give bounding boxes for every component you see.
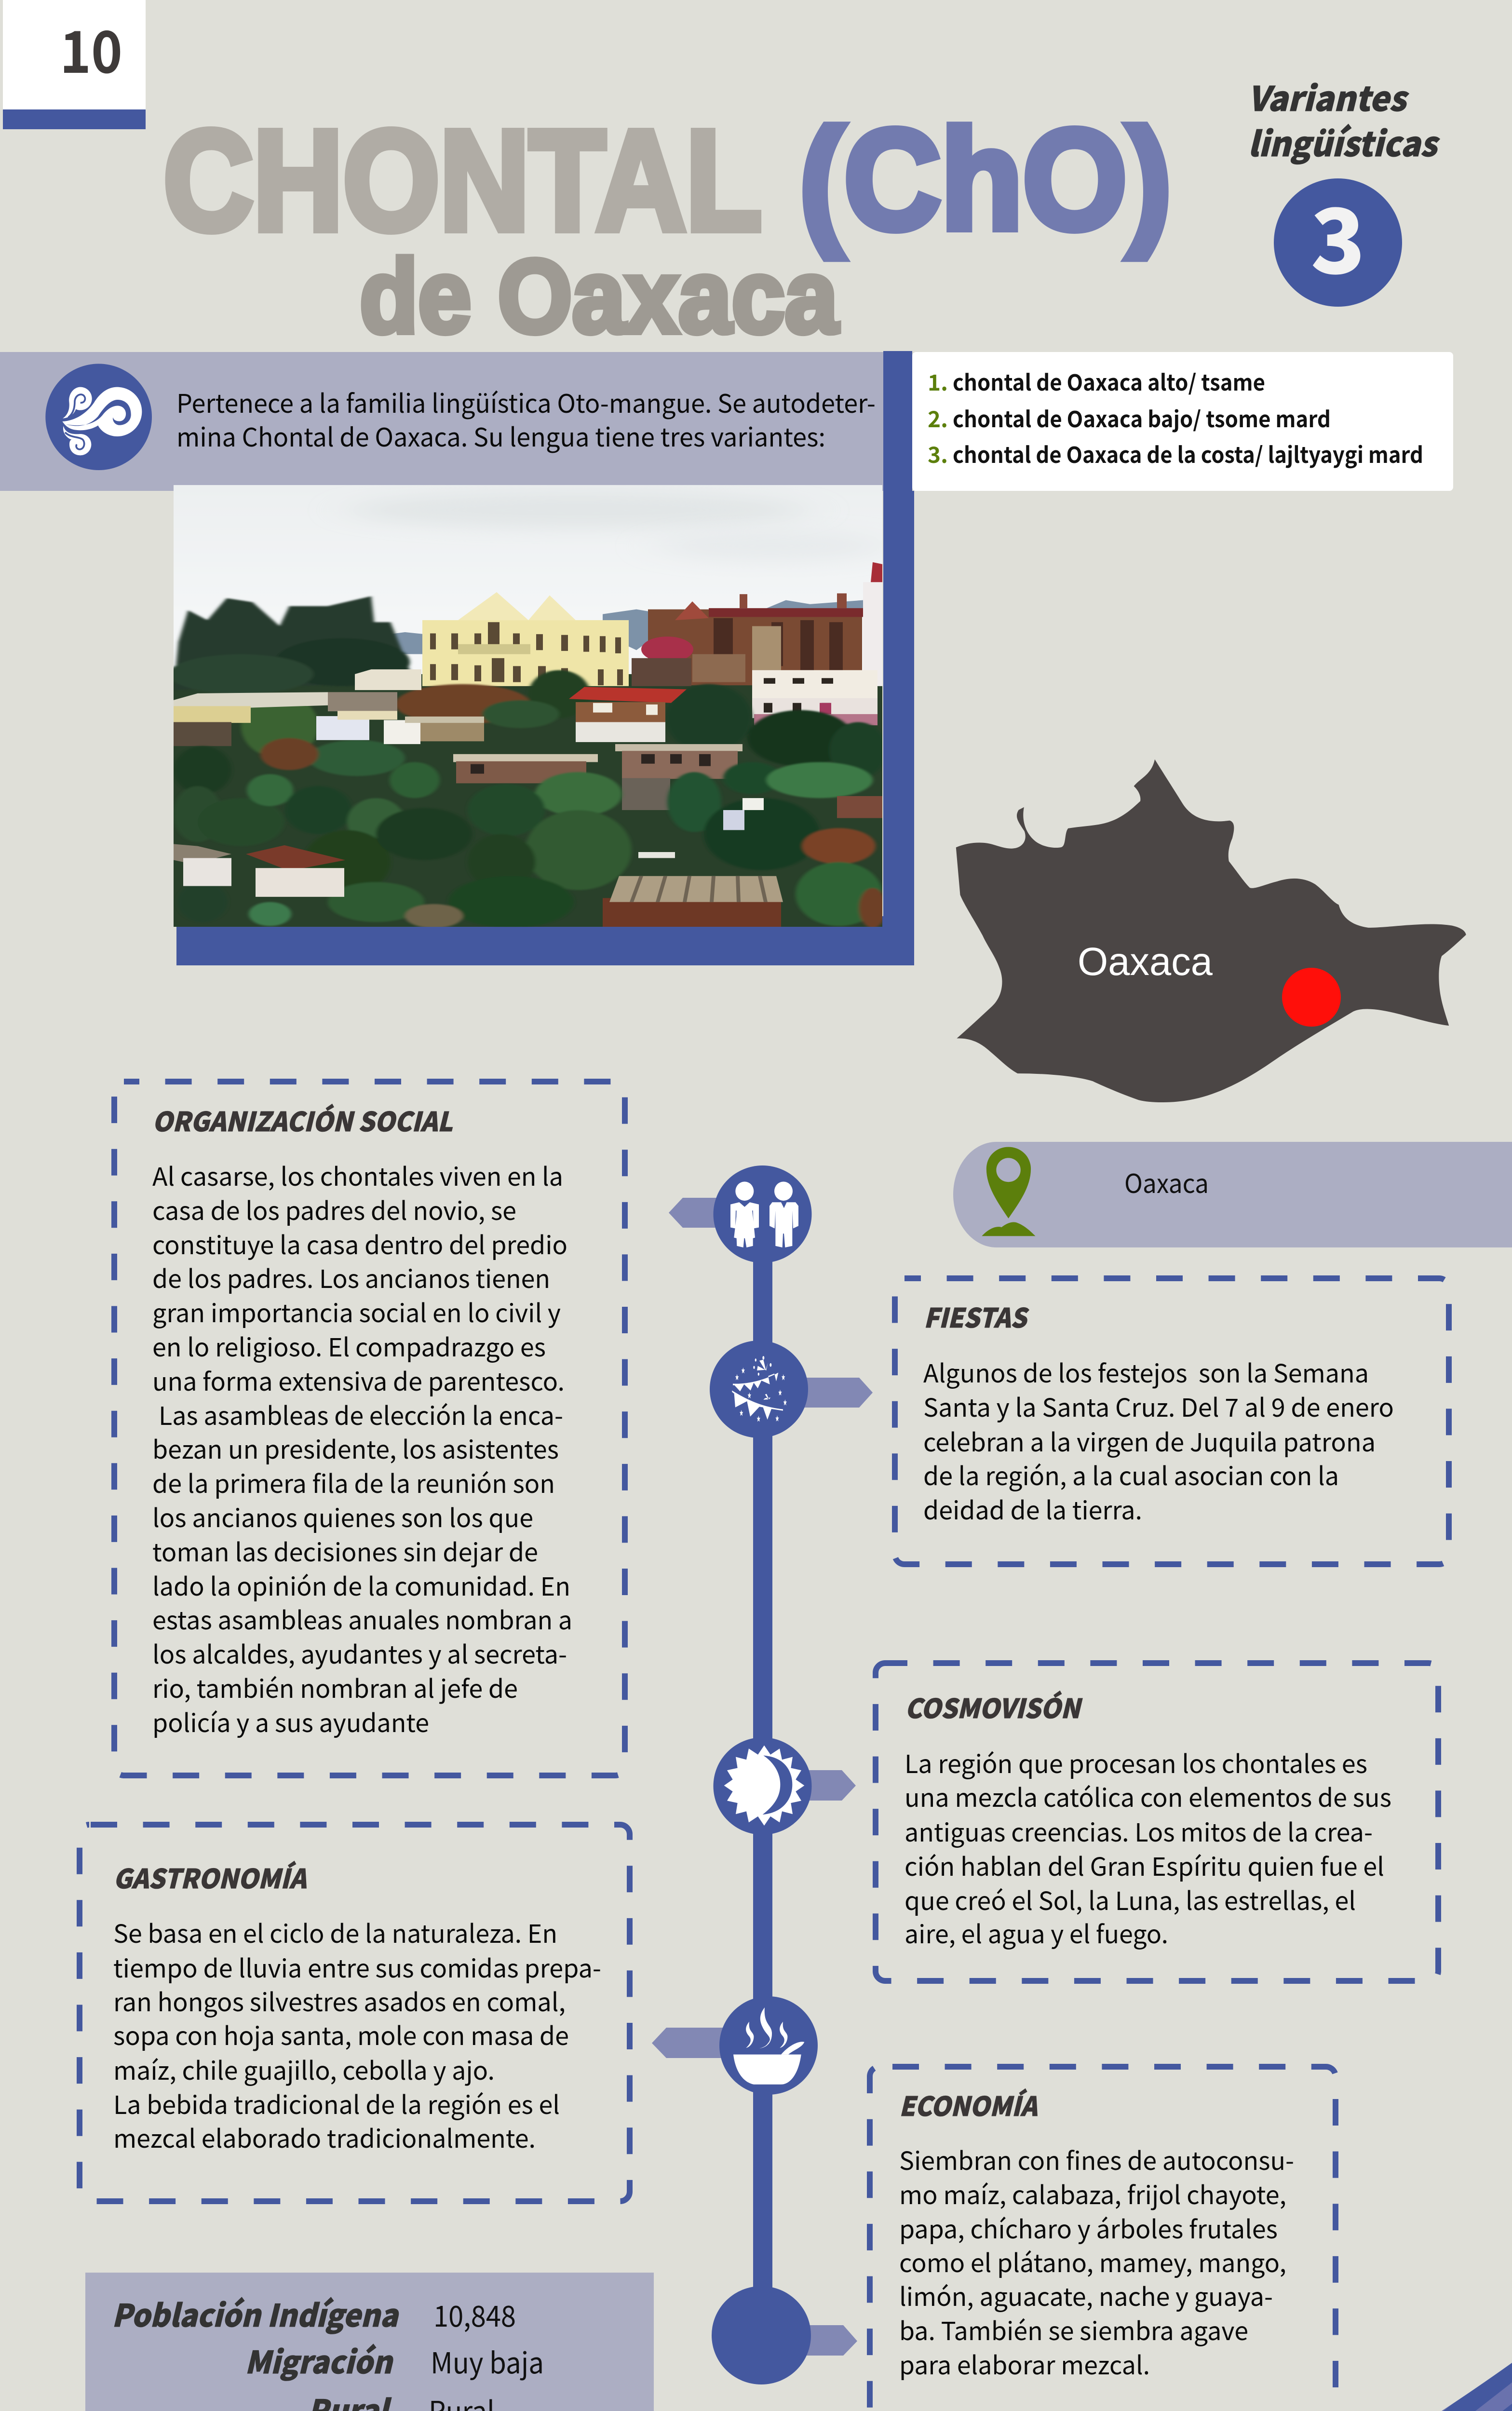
body text: maíz, chile guajillo, cebolla y ajo. — [113, 2051, 495, 2087]
pill label: Oaxaca — [1124, 1163, 1209, 1201]
panel: statistics — [85, 2273, 654, 2411]
node: sun and moon — [714, 1737, 812, 1835]
stat: población indígena: Población Indígena — [112, 2291, 400, 2336]
body text: papa, chícharo y árboles frutales — [899, 2209, 1278, 2246]
woven pattern footer — [3, 2363, 1512, 2411]
body text: en lo religioso. El compadrazgo es — [152, 1327, 546, 1364]
body text: Se basa en el ciclo de la naturaleza. En — [113, 1914, 557, 1950]
icon: location pin — [982, 1147, 1036, 1236]
location pill — [953, 1142, 1512, 1247]
arrow 2 — [791, 1378, 873, 1408]
body text: de los padres. Los ancianos tienen — [152, 1259, 550, 1295]
body text: tiempo de lluvia entre sus comidas prepa- — [113, 1949, 601, 1985]
body text: de la región, a la cual asocian con la — [923, 1456, 1339, 1492]
title: Chontal: CHONTAL — [163, 101, 762, 260]
arrow 3 — [791, 1770, 856, 1801]
body text: aire, el agua y el fuego. — [904, 1914, 1168, 1950]
body text: celebran a la virgen de Juquila patrona — [923, 1422, 1376, 1459]
body text: rio, también nombran al jefe de — [152, 1669, 518, 1705]
brown church — [648, 610, 862, 685]
arrow 5 — [791, 2325, 857, 2356]
map marker — [1282, 968, 1341, 1027]
body text: limón, aguacate, nache y guaya- — [899, 2277, 1273, 2313]
body text: mezcal elaborado tradicionalmente. — [113, 2119, 536, 2155]
body text: toman las decisiones sin dejar de — [152, 1532, 538, 1569]
body text: ba. También se siembra agave — [899, 2311, 1248, 2347]
body text: una mezcla católica con elementos de sus — [904, 1778, 1391, 1814]
intro text — [176, 384, 876, 454]
body text: Santa y la Santa Cruz. Del 7 al 9 de enero — [923, 1388, 1394, 1424]
photo frame — [176, 351, 914, 965]
stat: población indígena: 10,848 — [433, 2293, 516, 2335]
variants list: chontal de Oaxaca de la costa/ lajltyaygi mard — [953, 438, 1423, 470]
heading: ORGANIZACIÓN SOCIAL — [152, 1100, 453, 1139]
body text: La bebida tradicional de la región es el — [113, 2085, 560, 2121]
body text: estas asambleas anuales nombran a — [152, 1600, 572, 1637]
body text — [923, 1354, 1394, 1527]
body text: policía y a sus ayudante — [152, 1703, 429, 1739]
variants list: 1. — [928, 366, 948, 397]
body text: antiguas creencias. Los mitos de la crea- — [904, 1813, 1373, 1849]
variantes count — [1248, 72, 1440, 307]
icon: swirl — [45, 364, 152, 470]
body text: constituye la casa dentro del predio — [152, 1225, 567, 1261]
intro text: mina Chontal de Oaxaca. Su lengua tiene tres variantes: — [176, 418, 825, 454]
body text: Las asambleas de elección la enca- — [159, 1396, 563, 1432]
body text: gran importancia social en lo civil y — [152, 1293, 561, 1329]
variants list: chontal de Oaxaca bajo/ tsome mard — [953, 402, 1331, 434]
photo: town on hillside — [169, 485, 887, 928]
body text: bezan un presidente, los asistentes — [152, 1430, 559, 1466]
body text: La región que procesan los chontales es — [904, 1744, 1367, 1780]
intro text: Pertenece a la familia lingüística Oto-mangue. Se autodeter- — [176, 384, 876, 420]
title: ChO code: (ChO) — [799, 100, 1172, 260]
body text: ción hablan del Gran Espíritu quien fue el — [904, 1847, 1384, 1883]
body text: de la primera fila de la reunión son — [152, 1464, 555, 1500]
stat: migración — [245, 2338, 544, 2383]
body text: los alcaldes, ayudantes y al secreta- — [152, 1635, 567, 1671]
body text — [904, 1744, 1391, 1950]
yellow building — [422, 620, 629, 686]
heading: COSMOVISÓN — [905, 1687, 1083, 1726]
body text: para elaborar mezcal. — [899, 2345, 1150, 2382]
map of Oaxaca — [956, 759, 1466, 1102]
timeline pole — [753, 1254, 772, 2343]
variantes label: lingüísticas — [1248, 118, 1440, 166]
stat: rural — [308, 2387, 495, 2411]
stat: migración: Migración — [245, 2338, 394, 2383]
body text: deidad de la tierra. — [923, 1490, 1142, 1527]
panel: gastronomía — [80, 1825, 630, 2201]
bottom houses — [174, 844, 231, 864]
stat: migración: Muy baja — [431, 2340, 544, 2382]
body text: Al casarse, los chontales viven en la — [152, 1157, 563, 1193]
body text: los ancianos quienes son los que — [152, 1498, 533, 1534]
body text: una forma extensiva de parentesco. — [152, 1362, 565, 1398]
body text: sopa con hoja santa, mole con masa de — [113, 2016, 569, 2052]
map label: Oaxaca — [1078, 940, 1213, 984]
variantes label: Variantes — [1248, 72, 1409, 121]
panel: fiestas — [895, 1278, 1449, 1564]
heading: GASTRONOMÍA — [113, 1857, 307, 1896]
body text: mo maíz, calabaza, frijol chayote, — [899, 2175, 1286, 2211]
variants list: 2. — [928, 402, 948, 434]
body text: lado la opinión de la comunidad. En — [152, 1567, 570, 1603]
body text: ran hongos silvestres asados en comal, — [113, 1982, 566, 2018]
variantes label — [1248, 72, 1440, 166]
timeline — [652, 1165, 873, 2384]
lower foliage — [174, 746, 886, 928]
heading: ECONOMÍA — [899, 2085, 1038, 2124]
white tower — [863, 582, 882, 686]
body text: que creó el Sol, la Luna, las estrellas, el — [904, 1881, 1356, 1917]
badge: 3 — [1274, 169, 1402, 307]
body text: Siembran con fines de autoconsu- — [899, 2141, 1294, 2177]
variants list: 3. — [928, 438, 948, 470]
body text: Algunos de los festejos son la Semana — [923, 1354, 1369, 1390]
body text: casa de los padres del novio, se — [152, 1191, 516, 1227]
heading: FIESTAS — [924, 1297, 1029, 1335]
node: bowl — [719, 1996, 818, 2095]
title — [163, 100, 1172, 354]
body text — [113, 1914, 601, 2155]
variants list — [912, 352, 1453, 491]
page number tab — [3, 0, 146, 129]
white building right — [752, 670, 878, 699]
badge: 3: 3 — [1310, 169, 1365, 299]
title: de Oaxaca: de Oaxaca — [360, 238, 839, 354]
body text — [152, 1157, 572, 1739]
panel: organización social — [114, 1082, 625, 1775]
body text: como el plátano, mamey, mango, — [899, 2243, 1286, 2279]
node: plain — [712, 2286, 811, 2384]
panel: cosmovisión — [876, 1663, 1438, 1981]
node: fiesta — [710, 1341, 808, 1438]
variants list: chontal de Oaxaca alto/ tsame — [953, 366, 1265, 397]
panel: economía — [870, 2067, 1336, 2411]
intro band — [0, 352, 883, 491]
arrow 4 — [652, 2028, 742, 2058]
mid houses — [241, 670, 887, 778]
page number: 10 — [60, 6, 122, 90]
body text — [899, 2141, 1294, 2382]
node: people — [714, 1165, 812, 1263]
arrow 1 — [669, 1198, 733, 1228]
